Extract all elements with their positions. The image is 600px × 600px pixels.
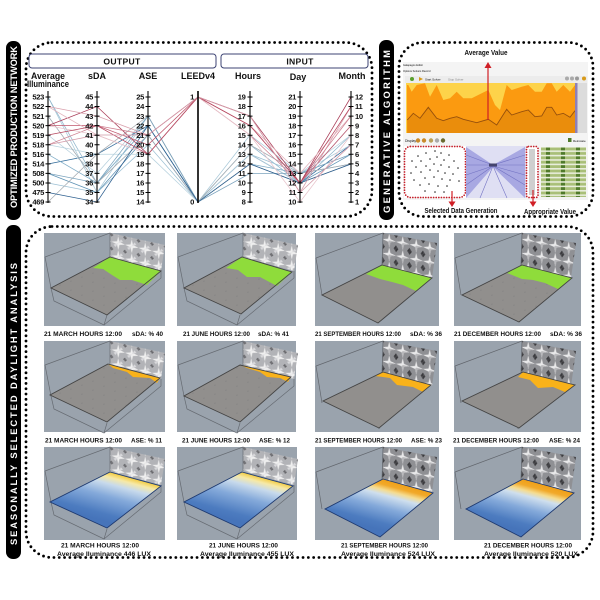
tick labels: hours: 11 (238, 169, 247, 178)
tick labels: average illuminance: 519 (32, 131, 44, 140)
tile: ASE june (177, 341, 298, 433)
axis headers: Average (31, 71, 65, 81)
tick labels: average illuminance: 475 (32, 188, 45, 197)
caption: illuminance march: 21 MARCH HOURS 12:00 (61, 542, 139, 550)
tick labels: average illuminance: 518 (32, 140, 44, 150)
tick labels: day: 19 (288, 112, 296, 121)
tick labels: sDA: 42 (85, 121, 93, 130)
panel: generative algorithm (399, 42, 593, 216)
tick labels: average illuminance: 516 (32, 150, 44, 159)
tile: ASE september (315, 341, 439, 432)
axis headers: Day (290, 72, 306, 82)
tick labels: month (355, 93, 363, 207)
tick labels: day: 15 (288, 150, 297, 159)
tick labels: month: 8 (355, 131, 359, 140)
tick labels: LEEDv4 (190, 93, 195, 207)
caption: illuminance december (484, 542, 579, 558)
tick labels: day (288, 93, 297, 207)
heading: output (29, 54, 216, 68)
tick labels: sDA: 45 (85, 93, 94, 102)
heading: input: INPUT (286, 56, 314, 66)
tick labels: ASE: 17 (136, 169, 144, 178)
caption: ASE june (182, 438, 290, 444)
solver window: Stop Solver (448, 78, 464, 82)
tick labels: hours (238, 93, 247, 207)
tick labels: average illuminance: 500 (32, 179, 44, 188)
tick labels: day: 18 (288, 121, 296, 130)
tick labels: month: 3 (355, 179, 359, 188)
tick labels: average illuminance: 521 (32, 112, 45, 121)
tick labels: hours: 18 (238, 102, 246, 111)
tick labels: sDA: 35 (85, 188, 94, 197)
tick labels: day: 16 (288, 140, 296, 150)
heading: input (221, 54, 368, 68)
caption: illuminance march (57, 542, 152, 558)
caption: ASE june: ASE: % 12 (259, 438, 290, 444)
side label: generative algorithm (379, 40, 394, 220)
caption: illuminance june: Average Iluminance 455 LUX (200, 551, 295, 558)
tick labels: sDA: 44 (85, 102, 94, 111)
tick labels: day: 20 (288, 102, 296, 111)
tick labels: average illuminance: 508 (32, 169, 44, 178)
caption: sDA march (44, 331, 163, 338)
tick labels: LEEDv4: 1 (190, 93, 195, 102)
tick labels: month: 11 (355, 102, 363, 111)
tick labels: hours: 10 (238, 179, 246, 188)
value column (526, 146, 538, 198)
arrow: average value (484, 62, 492, 120)
axis headers: Month (338, 71, 366, 81)
parallel plot (466, 146, 526, 198)
tick labels: month: 1 (355, 198, 360, 207)
caption: sDA june: sDA: % 41 (258, 331, 289, 338)
tick labels: month: 12 (355, 93, 363, 102)
tick labels: month: 10 (355, 112, 363, 121)
caption: ASE december: 21 DECEMBER HOURS 12:00 (453, 438, 539, 444)
tick labels: day: 17 (288, 131, 296, 140)
axes (48, 91, 351, 203)
caption: ASE september: ASE: % 23 (411, 438, 442, 444)
caption: illuminance december: 21 DECEMBER HOURS 12:00 (484, 542, 572, 550)
tick labels: hours: 13 (238, 150, 246, 159)
caption: illuminance september: Average Iluminance 524 LUX (341, 551, 436, 558)
tick labels: hours: 16 (238, 121, 246, 130)
heading: output: OUTPUT (103, 56, 141, 66)
tick labels: hours: 14 (238, 140, 247, 150)
side label: seasonally selected daylight analysis: SEASONALLY SELECTED DAYLIGHT ANALYSIS (8, 263, 19, 545)
caption: ASE march: ASE: % 11 (131, 438, 162, 444)
tick labels: average illuminance: 523 (32, 93, 44, 102)
tick labels: sDA: 38 (85, 160, 93, 169)
solver window (403, 62, 588, 200)
tick labels: ASE: 15 (136, 188, 145, 197)
caption: sDA june (183, 331, 289, 338)
caption: sDA december: 21 DECEMBER HOURS 12:00 (454, 331, 541, 338)
axis headers (27, 71, 366, 89)
panel: daylight analysis (26, 226, 593, 558)
label: average value: Average Value (464, 48, 508, 57)
tick labels: day: 10 (288, 198, 296, 207)
tick labels: average illuminance: 469 (32, 198, 44, 207)
caption: ASE september: 21 SEPTEMBER HOURS 12:00 (315, 438, 402, 444)
tick labels: month: 2 (355, 188, 359, 197)
tile: ASE december (454, 341, 581, 432)
display bar: Reinstate (573, 139, 586, 143)
display bar: Display (405, 139, 416, 143)
solver window: Start Solver (425, 78, 441, 82)
tick labels: hours: 12 (238, 160, 246, 169)
tick labels: month: 4 (355, 169, 360, 178)
tick labels: sDA: 43 (85, 112, 93, 121)
tick labels: sDA: 40 (85, 140, 93, 150)
data lines: failing LEED (48, 97, 351, 202)
axis headers: Illuminance (27, 79, 69, 89)
tick labels: average illuminance: 514 (32, 160, 45, 169)
tile: ASE march (44, 341, 165, 433)
caption: illuminance march: Average Iluminance 446 LUX (57, 551, 152, 558)
tick labels: day: 21 (288, 93, 297, 102)
tick labels: ASE: 18 (136, 160, 144, 169)
tick labels: ASE: 22 (136, 121, 144, 130)
tick labels: sDA (85, 93, 94, 207)
tick labels: hours: 19 (238, 93, 246, 102)
scatter plot (404, 146, 466, 198)
tick labels: day: 13 (288, 169, 296, 178)
tick labels: sDA: 41 (85, 131, 94, 140)
arrow: selected data generation (448, 191, 456, 207)
caption: illuminance september (341, 542, 436, 558)
tick labels: day: 12 (288, 179, 296, 188)
tile: sDA march (44, 233, 165, 326)
arrow: appropriate value (530, 190, 536, 207)
display bar (405, 138, 586, 143)
tile: sDA september (315, 233, 439, 326)
side label: optimized production network (6, 41, 21, 220)
tick labels: month: 9 (355, 121, 359, 130)
tick labels: ASE: 23 (136, 112, 144, 121)
side label: seasonally selected daylight analysis (6, 225, 21, 559)
caption: sDA june: 21 JUNE HOURS 12:00 (183, 331, 250, 338)
tile: illuminance september (315, 447, 439, 540)
tick labels: ASE: 25 (136, 93, 145, 102)
result grid (541, 147, 586, 197)
tile: sDA june (177, 233, 298, 326)
caption: ASE june: 21 JUNE HOURS 12:00 (182, 438, 250, 444)
caption: sDA september: 21 SEPTEMBER HOURS 12:00 (315, 331, 401, 338)
tick labels: LEEDv4: 0 (190, 198, 194, 207)
tile: illuminance december (454, 447, 581, 540)
tick labels: month: 7 (355, 140, 359, 150)
caption: illuminance june (200, 542, 295, 558)
tick labels: hours: 8 (242, 198, 246, 207)
tick labels: hours: 15 (238, 131, 247, 140)
caption: illuminance december: Average Iluminance 520 LUX (484, 551, 579, 558)
axis headers: ASE (139, 71, 157, 81)
side label: optimized production network: OPTIMIZED PRODUCTION NETWORK (8, 46, 19, 208)
axis headers: LEEDv4 (181, 71, 215, 81)
tick labels: ASE: 24 (136, 102, 145, 111)
tick labels: average illuminance (32, 93, 45, 207)
tick labels: month: 5 (355, 160, 360, 169)
caption: illuminance september: 21 SEPTEMBER HOURS 12:00 (341, 542, 428, 550)
tile: sDA december (454, 233, 581, 326)
tick labels: ASE: 19 (136, 150, 144, 159)
tick labels: ASE: 20 (136, 140, 144, 150)
tick labels: sDA: 34 (85, 198, 94, 207)
tile: illuminance march (44, 447, 165, 540)
caption: sDA march: 21 MARCH HOURS 12:00 (44, 331, 122, 338)
side label: generative algorithm: GENERATIVE ALGORITHM (381, 50, 392, 213)
caption: sDA march: sDA: % 40 (132, 331, 163, 338)
caption: sDA december: sDA: % 36 (550, 331, 582, 338)
tick labels: sDA: 36 (85, 179, 93, 188)
tick labels: sDA: 39 (85, 150, 93, 159)
tick labels: month: 6 (355, 150, 359, 159)
caption: illuminance june: 21 JUNE HOURS 12:00 (209, 542, 278, 550)
label: selected data generation: Selected Data Generation (424, 206, 498, 215)
data lines: passing LEED (48, 97, 351, 202)
tick labels: sDA: 37 (85, 169, 93, 178)
caption: sDA september: sDA: % 36 (410, 331, 442, 338)
tick labels: ASE: 16 (136, 179, 144, 188)
panel: parallel coordinates network (26, 42, 372, 216)
label: appropriate value: Appropriate Value (524, 207, 576, 216)
fitness chart (406, 83, 587, 133)
caption: ASE march (45, 438, 162, 444)
tick labels: ASE (136, 93, 145, 207)
axis headers: Hours (235, 71, 261, 81)
tick labels: average illuminance: 520 (32, 121, 44, 130)
tick labels: ASE: 21 (136, 131, 145, 140)
tile: illuminance june (177, 447, 298, 540)
tick labels: hours: 9 (242, 188, 246, 197)
caption: ASE december: ASE: % 24 (549, 438, 580, 444)
tick labels: hours: 17 (238, 112, 246, 121)
tick labels: average illuminance: 522 (32, 102, 44, 111)
tick labels: day: 14 (288, 160, 297, 169)
solver window: Options Solvers Record (403, 69, 431, 73)
axis headers: sDA (88, 71, 106, 81)
solver window: Galapagos Editor (403, 63, 423, 67)
caption: ASE march: 21 MARCH HOURS 12:00 (45, 438, 122, 444)
tick labels: ASE: 14 (136, 198, 145, 207)
tick labels: day: 11 (289, 188, 297, 197)
